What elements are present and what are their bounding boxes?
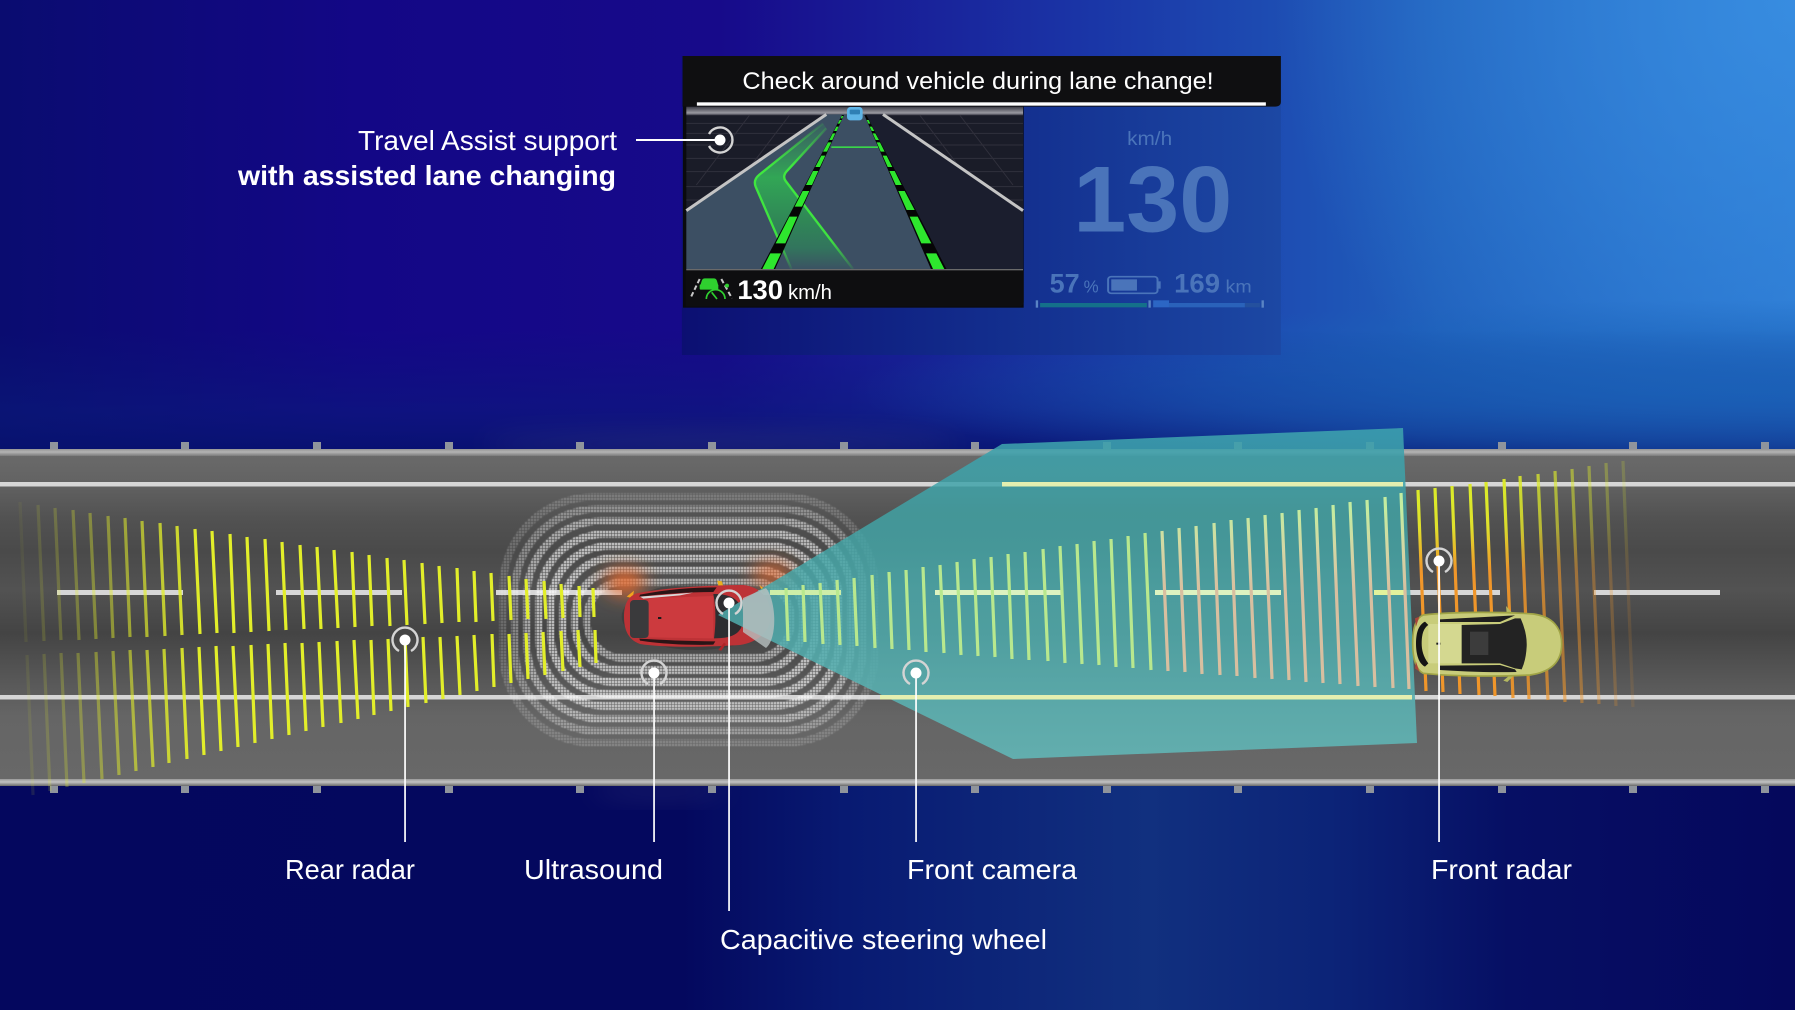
road — [0, 442, 1795, 793]
panel backdrop — [682, 56, 1281, 355]
guard rail posts bottom — [50, 785, 1769, 793]
callout: capacitive steering wheel — [716, 591, 1047, 955]
front radar beams — [786, 461, 1633, 707]
callout: travel assist — [237, 125, 732, 191]
cone highlight near windscreen — [743, 588, 774, 648]
front camera field of view — [718, 428, 1417, 759]
rail bottom — [0, 779, 1795, 786]
range bar — [1036, 300, 1264, 308]
black header bar and readouts — [683, 56, 1281, 308]
lane-change assist screen — [683, 105, 1024, 308]
lane markings seen through the field — [770, 482, 1412, 700]
status bar with set speed: km/h — [788, 282, 832, 304]
speed readout: km/h — [1127, 129, 1172, 150]
set speed: 130 — [737, 275, 783, 305]
leader line — [636, 139, 716, 141]
callout heading: Travel Assist support — [358, 125, 617, 156]
lane line top — [0, 482, 1795, 486]
callout: ultrasound: Ultrasound — [524, 854, 663, 885]
road left and centre lanes — [686, 114, 947, 270]
orange glow around car — [605, 562, 792, 596]
status bar with set speed — [686, 269, 1024, 307]
callout: front radar: Front radar — [1431, 854, 1572, 885]
icon: battery — [1108, 277, 1161, 293]
battery and range readout: km — [1226, 277, 1252, 297]
callout: front camera — [904, 661, 1077, 885]
lane line bottom — [0, 695, 1795, 700]
car: yellow vehicle ahead — [1413, 606, 1562, 682]
callout: ultrasound — [524, 661, 666, 885]
information panel — [682, 56, 1281, 355]
road edges — [686, 114, 1023, 211]
callout: front radar — [1426, 549, 1572, 885]
asphalt — [0, 452, 1795, 782]
marker — [709, 128, 732, 152]
front radar beams past the field — [1418, 461, 1633, 707]
ultrasound field — [503, 497, 875, 743]
black header bar — [683, 56, 1281, 107]
lane dashes — [760, 115, 947, 270]
front radar beams inside camera field, far — [1162, 493, 1409, 689]
callout heading: with assisted lane changing — [237, 160, 616, 191]
battery and range readout — [1036, 270, 1264, 308]
front radar beams inside camera field, near — [786, 533, 1151, 670]
rear radar lower fan — [27, 630, 596, 795]
callout: rear radar: Rear radar — [285, 854, 415, 885]
speed readout: 130 — [1073, 147, 1232, 252]
rail top — [0, 449, 1795, 456]
callout heading — [237, 125, 617, 191]
rear radar beams — [20, 502, 596, 795]
callout: capacitive steering wheel: Capacitive steering wheel — [720, 924, 1047, 955]
road right lane — [865, 114, 1023, 270]
planned lane-change path — [755, 123, 853, 269]
rear radar upper fan — [20, 502, 594, 642]
callout: front camera: Front camera — [907, 854, 1077, 885]
callout: rear radar — [285, 628, 418, 885]
battery and range readout: 57 — [1050, 270, 1080, 299]
warning message: Check around vehicle during lane change! — [742, 67, 1214, 94]
battery and range readout: 169 — [1174, 270, 1220, 299]
car: red ego vehicle — [622, 581, 772, 651]
icon: travel assist — [690, 278, 732, 299]
center dashes — [57, 590, 1720, 595]
guard rail posts top — [50, 442, 1769, 450]
battery and range readout: % — [1084, 277, 1099, 297]
target line — [831, 146, 878, 148]
vehicle ahead icon — [847, 107, 863, 120]
